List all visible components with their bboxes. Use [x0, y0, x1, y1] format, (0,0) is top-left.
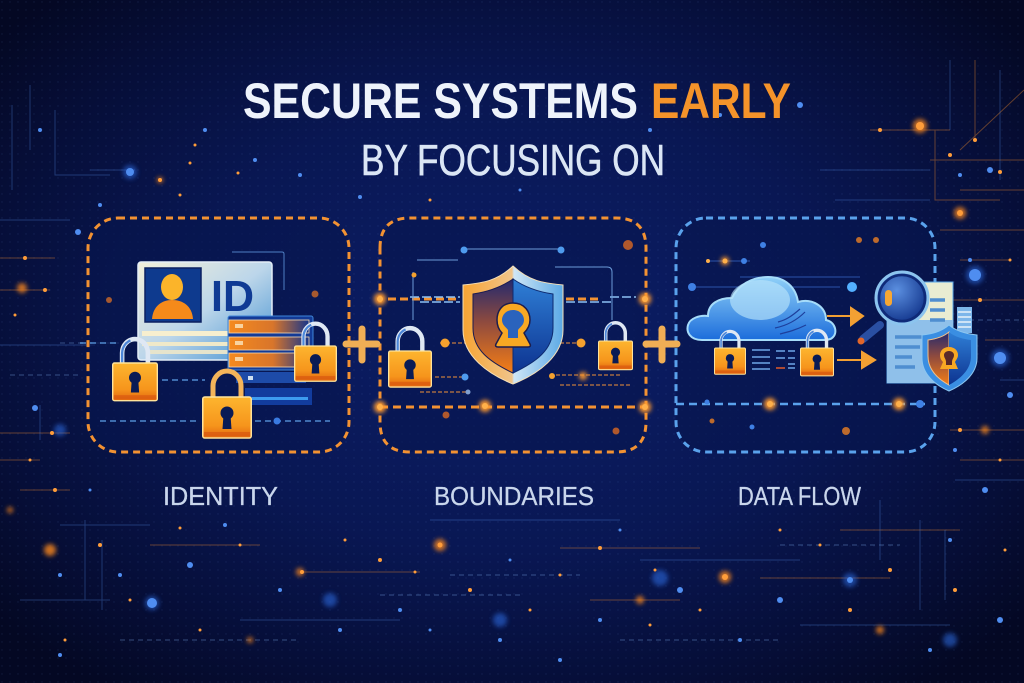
arrow: upper [827, 308, 863, 325]
icon: padlock left [113, 339, 157, 401]
icon: padlock right [599, 323, 632, 370]
orange glows [7, 119, 989, 643]
icon: keyhole [496, 303, 530, 347]
title: SECURE SYSTEMS [243, 73, 638, 129]
panel: data flow [676, 218, 977, 452]
icon: server stack [228, 316, 313, 405]
blue glows [54, 165, 1009, 647]
panel: boundaries [374, 218, 651, 452]
icon: padlock bottom [203, 371, 251, 438]
plus sign 2 [646, 329, 677, 360]
icon: magnifier [858, 272, 928, 344]
icon: padlock left [389, 328, 431, 387]
plus sign 1 [346, 329, 377, 360]
subtitle: BY FOCUSING ON [361, 136, 665, 185]
icon: id card: ID [211, 272, 254, 321]
label: identity: IDENTITY [163, 481, 278, 511]
arrow: lower [837, 352, 875, 368]
icon: cloud [688, 277, 835, 340]
icon: id card [138, 262, 272, 360]
icon: padlock cloud left [714, 331, 746, 374]
icon: shield with keyhole [463, 266, 563, 384]
label: data flow: DATA FLOW [738, 481, 861, 511]
data lines [752, 350, 795, 369]
icon: padlock cloud right [801, 330, 833, 376]
icon: small shield [922, 325, 977, 391]
label: boundaries: BOUNDARIES [434, 481, 594, 511]
icon: padlock right [295, 324, 336, 381]
title: EARLY [651, 73, 791, 129]
icon: document [887, 282, 972, 383]
panel: identity [80, 218, 349, 452]
blue dots [32, 102, 1013, 662]
small orange dots [14, 122, 1012, 642]
